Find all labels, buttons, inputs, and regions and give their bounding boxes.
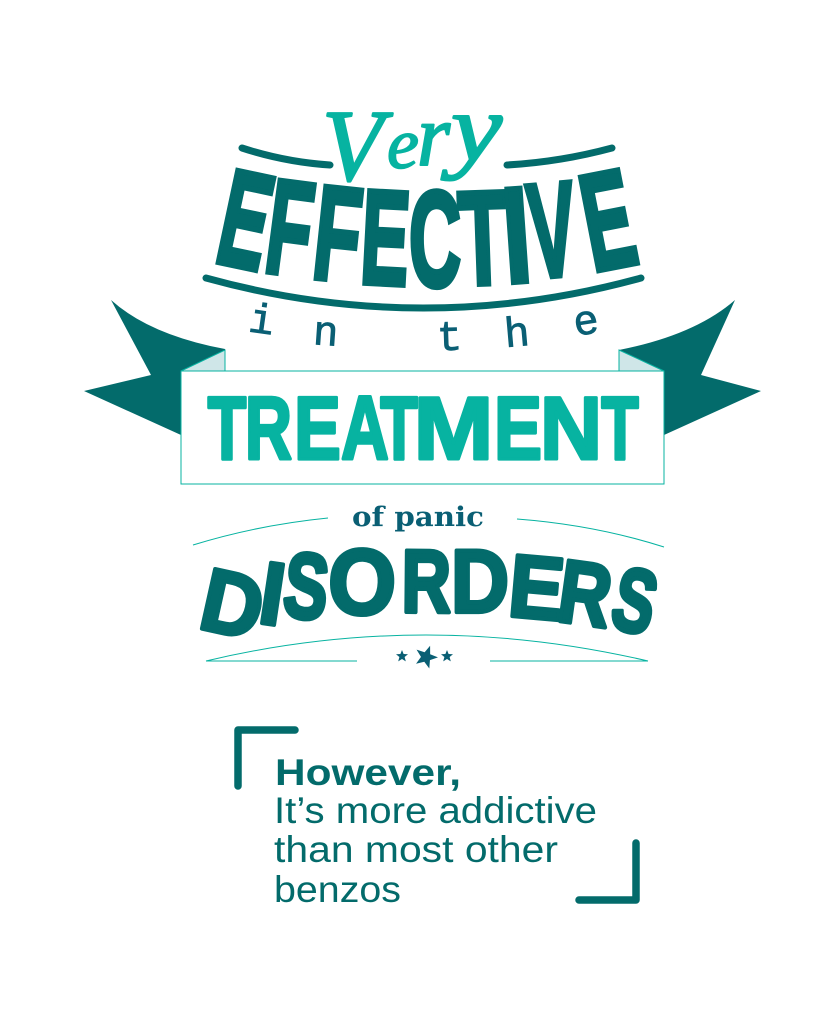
heading word: EFFECTIVE: C	[409, 164, 461, 316]
heading word: DISORDERS: D	[192, 550, 273, 660]
thin arc: right of of panic	[517, 519, 664, 547]
heading word: DISORDERS	[192, 529, 666, 660]
ribbon: right fold	[619, 350, 664, 371]
heading word: DISORDERS: R	[401, 531, 451, 631]
heading word: DISORDERS: E	[505, 537, 568, 640]
callout text: benzos	[274, 869, 401, 910]
heading word: EFFECTIVE: V	[522, 153, 582, 307]
banner word: TREATMENT: M	[414, 378, 493, 478]
callout text	[274, 752, 597, 910]
banner word: TREATMENT: T	[601, 380, 639, 479]
phrase: in the: h	[502, 310, 532, 360]
icon: three stars	[396, 642, 453, 670]
callout text: than most other	[274, 829, 558, 870]
ribbon: right tail	[619, 300, 761, 435]
curved rule: below EFFECTIVE	[206, 278, 641, 308]
banner word: TREATMENT: E	[494, 380, 542, 479]
ribbon: main banner box	[181, 371, 664, 484]
banner word: TREATMENT: E	[294, 379, 341, 478]
curved rule: right of Very	[507, 148, 612, 165]
ornament: bottom arc with rules	[206, 635, 648, 661]
phrase: of panic: of panic	[352, 502, 484, 533]
callout text: It’s more addictive	[274, 790, 597, 831]
callout text: However,	[275, 752, 461, 793]
thin arc: left of of panic	[193, 518, 328, 545]
heading word: EFFECTIVE	[206, 141, 647, 316]
banner word: TREATMENT: T	[380, 380, 418, 479]
heading word: Very: V	[322, 89, 393, 202]
banner word: TREATMENT: R	[245, 380, 292, 478]
heading word: Very	[322, 75, 502, 202]
phrase: in the: t	[436, 315, 463, 363]
heading word: DISORDERS: S	[279, 533, 334, 641]
heading word: DISORDERS: S	[603, 548, 666, 655]
heading word: EFFECTIVE: F	[258, 151, 322, 305]
heading word: Very: y	[441, 75, 502, 181]
heading word: Very: r	[417, 87, 450, 184]
heading word: DISORDERS: I	[253, 543, 291, 645]
banner word: TREATMENT	[208, 378, 639, 479]
banner word: TREATMENT: A	[341, 378, 389, 478]
heading word: EFFECTIVE: E	[569, 141, 647, 301]
corner bracket: bottom right	[579, 843, 636, 900]
phrase: in the: e	[570, 297, 602, 349]
heading word: EFFECTIVE: T	[456, 164, 509, 314]
curved rule: left of Very	[242, 148, 330, 165]
phrase: in the: n	[312, 309, 340, 359]
heading word: DISORDERS: R	[553, 542, 618, 647]
heading word: EFFECTIVE: F	[307, 159, 368, 312]
phrase: in the: i	[246, 297, 277, 348]
corner bracket: top left	[238, 730, 295, 786]
ribbon: left tail	[84, 300, 225, 435]
heading word: EFFECTIVE: E	[358, 162, 413, 314]
banner word: TREATMENT: N	[540, 379, 602, 478]
heading word: EFFECTIVE: I	[498, 159, 536, 313]
heading word: DISORDERS: D	[451, 532, 509, 631]
heading word: EFFECTIVE: E	[206, 141, 285, 300]
banner word: TREATMENT: T	[208, 379, 246, 479]
heading word: Very: e	[387, 104, 419, 184]
phrase: in the	[246, 297, 602, 363]
heading word: DISORDERS: O	[326, 529, 398, 636]
ribbon: left fold	[181, 350, 225, 371]
